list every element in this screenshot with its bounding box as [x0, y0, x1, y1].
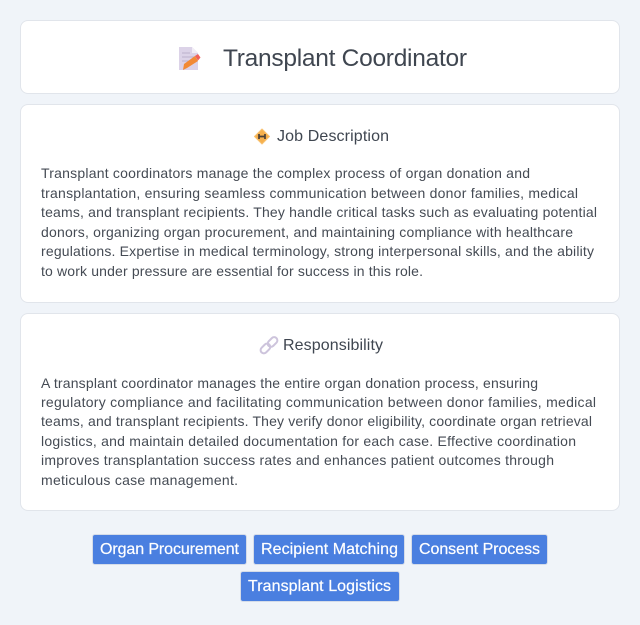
tag: consent process: [411, 534, 548, 565]
tag: organ procurement: [92, 534, 247, 565]
responsibility text: regulatory compliance and facilitating communication between donor families, medical: [41, 394, 596, 410]
job description text: to work under pressure are essential for success in this role.: [41, 263, 423, 279]
panel: job description: [20, 104, 620, 303]
tag: recipient matching: [253, 534, 405, 565]
responsibility text: meticulous case management.: [41, 472, 238, 488]
job description text: donors, organizing organ procurement, and maintaining compliance with healthcare: [41, 224, 573, 240]
tag: consent process: Consent Process: [419, 541, 540, 558]
job description text: Transplant coordinators manage the complex process of organ donation and: [41, 165, 530, 181]
icon: document with pencil: [179, 47, 200, 70]
responsibility text: improves transplantation success rates and enhances patient outcomes through: [41, 452, 554, 468]
job description text: transplantation, ensuring seamless communication between donor families, medical: [41, 185, 578, 201]
tag: organ procurement: Organ Procurement: [100, 541, 240, 558]
job description text: [41, 165, 597, 279]
job description text: regulations. Expertise in medical terminology, strong interpersonal skills, and the ability: [41, 243, 594, 259]
responsibility text: logistics, and maintain detailed documentation for each case. Effective coordination: [41, 433, 576, 449]
responsibility text: A transplant coordinator manages the entire organ donation process, ensuring: [41, 375, 538, 391]
icon: chain link: [259, 336, 279, 355]
tag: transplant logistics: [240, 571, 400, 602]
panel: title: [20, 20, 620, 94]
tag: recipient matching: Recipient Matching: [261, 541, 398, 558]
panel: responsibility: [20, 313, 620, 511]
heading: responsibility: Responsibility: [283, 337, 383, 354]
responsibility text: [41, 375, 596, 488]
icon: diamond warning: [254, 129, 270, 144]
job description text: teams, and transplant recipients. They handle critical tasks such as evaluating potential: [41, 204, 597, 220]
responsibility text: teams, and transplant recipients. They verify donor eligibility, coordinate organ retrieval: [41, 413, 592, 429]
heading: job description: Job Description: [277, 128, 389, 145]
title: Transplant Coordinator: [223, 45, 467, 72]
tag: transplant logistics: Transplant Logistics: [248, 578, 391, 595]
